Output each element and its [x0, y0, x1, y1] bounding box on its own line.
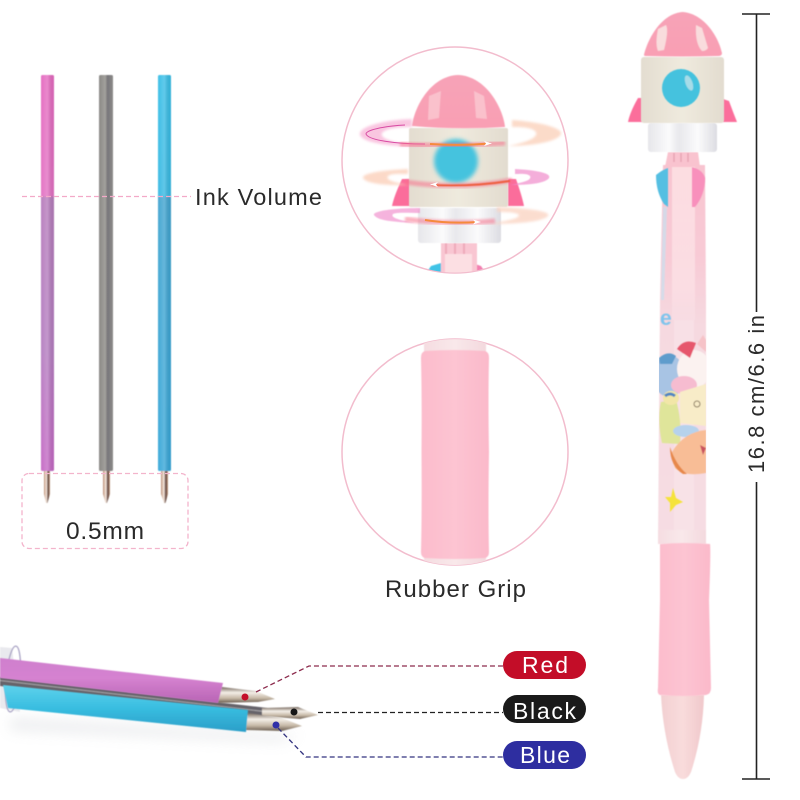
green character — [659, 400, 680, 444]
black refill — [0, 677, 318, 719]
blue label pill — [503, 741, 586, 769]
panel: full pen — [628, 12, 737, 779]
pen length label: 16.8 cm/6.6 in — [744, 315, 769, 473]
ink volume label: Ink Volume — [195, 184, 322, 210]
black label pill — [503, 695, 586, 724]
panel: spinning eraser circle — [342, 47, 568, 277]
ink volume dashed marker — [22, 196, 191, 198]
panel: ink refills — [22, 75, 322, 548]
blue clip — [656, 168, 668, 207]
circle frame — [342, 47, 568, 273]
grey refill — [99, 75, 113, 503]
grip close-up — [421, 339, 489, 567]
purple refill — [0, 658, 275, 703]
rocket fins — [628, 98, 737, 122]
white cat character — [676, 350, 706, 386]
blue letter: e — [660, 307, 672, 330]
black label pill: Black — [513, 698, 576, 724]
peach pig character — [672, 430, 706, 474]
light blue blob — [673, 425, 699, 437]
rocket body — [641, 57, 724, 123]
blue dot — [272, 722, 280, 728]
cream character — [680, 384, 706, 426]
white collar — [648, 123, 717, 152]
tip size dashed box — [22, 474, 188, 548]
pen tip — [661, 695, 704, 779]
rubber grip — [658, 543, 711, 696]
refill tube end — [0, 646, 23, 712]
yellow star — [665, 488, 683, 512]
spin swirl rings — [360, 119, 561, 224]
blue label pill: Blue — [520, 742, 570, 768]
blue refill — [158, 75, 171, 503]
pink clip — [692, 167, 705, 207]
rocket nose — [644, 12, 722, 56]
blue leader line — [278, 728, 503, 757]
tip size label: 0.5mm — [66, 518, 144, 545]
red label pill — [503, 651, 586, 679]
circle frame — [342, 339, 568, 565]
top ring — [360, 119, 561, 147]
panel: refill tips photo — [0, 646, 586, 769]
red leader line — [256, 666, 503, 692]
collar — [418, 208, 501, 243]
red label pill: Red — [522, 652, 568, 678]
rubber grip label: Rubber Grip — [385, 576, 526, 603]
neck and clips — [428, 242, 484, 272]
red dot — [242, 694, 248, 700]
black dot — [290, 708, 298, 716]
black leader line — [318, 712, 503, 714]
soft shadow — [10, 718, 300, 742]
bottom ring — [374, 207, 548, 224]
rocket fins — [392, 179, 524, 206]
middle ring — [363, 169, 549, 187]
rocket body — [409, 128, 508, 207]
blue refill — [3, 685, 302, 732]
panel: rubber grip circle — [342, 339, 568, 603]
barrel character artwork — [659, 312, 706, 475]
pen barrel — [658, 165, 706, 544]
porthole — [434, 139, 478, 183]
porthole — [662, 69, 700, 107]
pen neck — [665, 152, 700, 167]
pink shrimp character — [671, 376, 697, 394]
purple refill — [41, 75, 54, 503]
blue character — [659, 356, 680, 396]
rocket nose — [412, 75, 505, 128]
